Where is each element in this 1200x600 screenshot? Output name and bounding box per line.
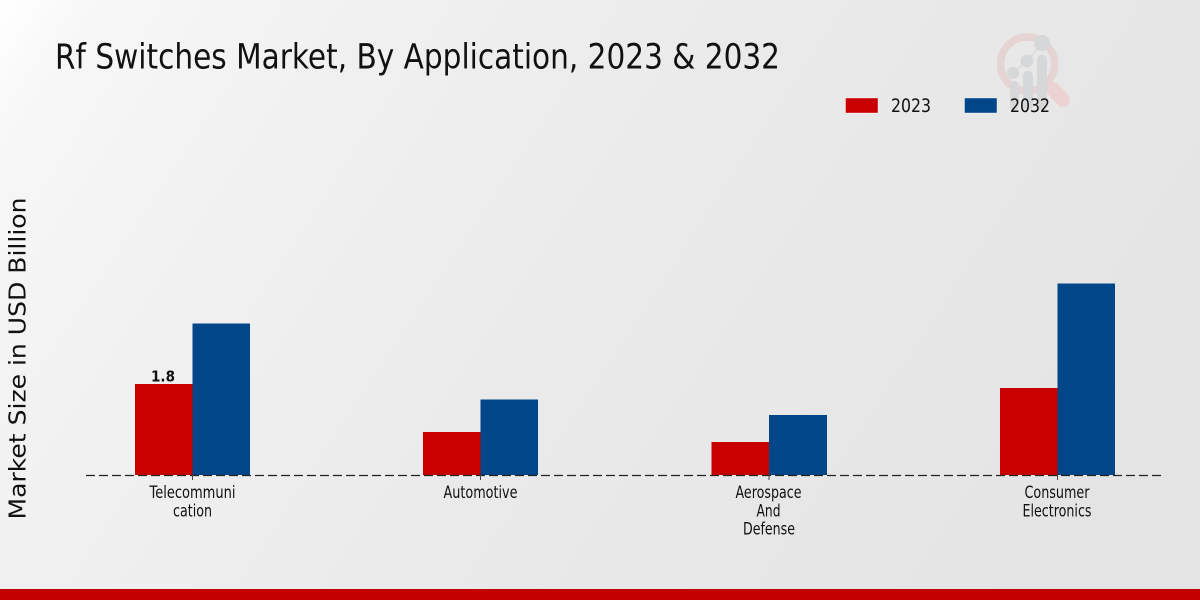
title: Rf Switches Market, By Application, 2023 & 2032 bbox=[55, 38, 780, 78]
bars: Aerospace And Defense bbox=[712, 415, 827, 475]
bars: Automotive bbox=[423, 400, 538, 475]
watermark logo icon bbox=[1000, 35, 1063, 110]
x axis label: Telecommunication bbox=[149, 483, 236, 520]
x axis label: Automotive: Automotive bbox=[444, 483, 518, 502]
value label 1.8: 1.8 bbox=[151, 368, 175, 386]
bars: Consumer Electronics bbox=[1000, 284, 1115, 475]
bottom red band bbox=[0, 589, 1200, 600]
legend swatch 2023 bbox=[846, 98, 878, 113]
legend label 2032: 2032 bbox=[1010, 95, 1050, 117]
x axis label: Aerospace And Defense bbox=[736, 483, 802, 538]
x axis label: Aerospace And Defense: Defense bbox=[743, 520, 795, 538]
x axis label: Consumer Electronics bbox=[1022, 483, 1092, 520]
x axis label: Consumer Electronics: Consumer bbox=[1024, 483, 1090, 502]
y axis label: Market Size in USD Billion bbox=[6, 198, 32, 520]
x axis label: Aerospace And Defense: And bbox=[756, 502, 780, 520]
x axis label: Aerospace And Defense: Aerospace bbox=[736, 483, 802, 502]
bar chart bbox=[86, 284, 1164, 480]
x axis label: Telecommunication: Telecommuni bbox=[149, 483, 236, 502]
x axis label: Consumer Electronics: Electronics bbox=[1022, 502, 1092, 520]
legend swatch 2032 bbox=[964, 98, 997, 113]
legend label 2023: 2023 bbox=[891, 95, 931, 117]
x axis label: Telecommunication: cation bbox=[173, 502, 212, 520]
bars: Telecommunication bbox=[135, 324, 250, 475]
dashed baseline bbox=[86, 474, 1164, 476]
tick marks bbox=[192, 475, 1058, 480]
legend bbox=[846, 95, 1050, 117]
